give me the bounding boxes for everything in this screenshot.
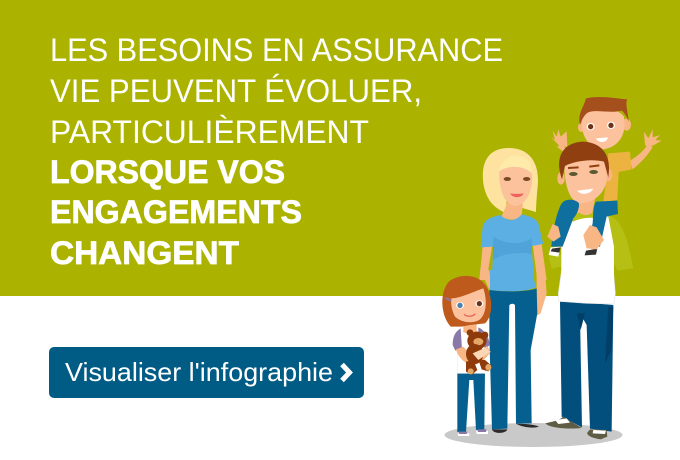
teddy bear [466,329,493,375]
son: arms [551,129,662,169]
title: CHANGENT [50,235,239,271]
title: LES BESOINS EN ASSURANCE [50,32,503,68]
son: legs [551,200,579,247]
title [50,32,503,271]
green header band [0,0,680,296]
title: PARTICULIÈREMENT [50,114,369,150]
son: shirt [603,152,632,202]
son: head [578,97,631,149]
father: hands [547,224,604,249]
button: Visualiser l'infographie [65,357,333,387]
figure: father with son on shoulders [545,97,662,439]
title: VIE PEUVENT ÉVOLUER, [50,73,422,109]
father: head [557,142,612,203]
illustration: family [442,97,662,447]
figure: girl with teddy bear [442,276,493,436]
title: ENGAGEMENTS [50,194,302,230]
ground shadow [444,423,622,447]
figure: mother [479,148,547,433]
title: LORSQUE VOS [50,154,285,190]
father: torso and arms [607,215,633,271]
button [49,347,364,398]
